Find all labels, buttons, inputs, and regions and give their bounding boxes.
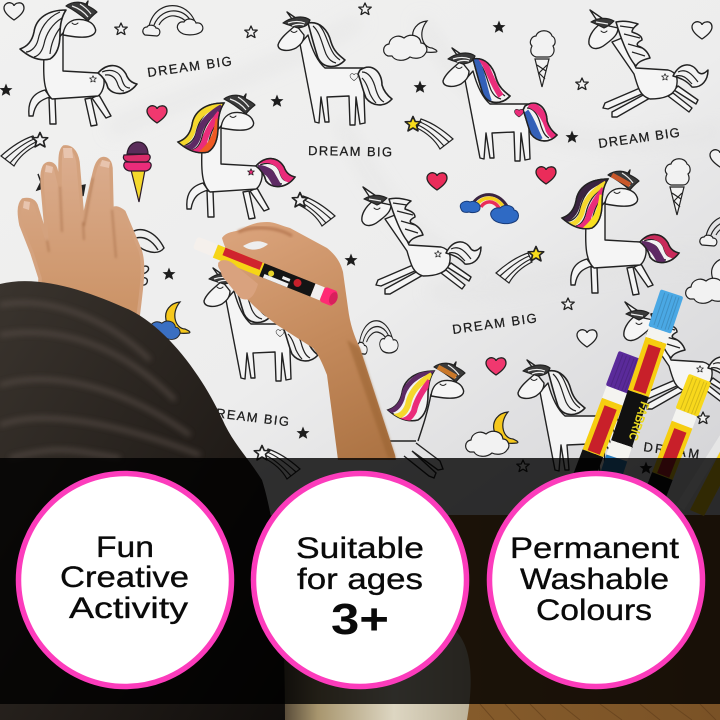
marker pen in hand — [192, 236, 340, 307]
marker: purple — [560, 351, 641, 514]
badge: fun creative activity — [18, 474, 232, 686]
badge: fun creative activity: Activity — [69, 592, 188, 625]
badge: permanent washable colours: Colours — [536, 594, 652, 627]
unicorn: right, yellow and pink mane — [562, 170, 680, 295]
marker: blue: FABRIC — [626, 400, 653, 443]
badge: suitable for ages 3+ — [254, 474, 466, 686]
dream big lettering: DREAM BIG — [451, 310, 538, 337]
thumb over pen — [218, 260, 258, 299]
hair — [0, 281, 285, 720]
marker: blue — [596, 289, 688, 492]
unicorn: rainbow mane, centre left — [178, 94, 296, 219]
unicorn: galloping top right — [589, 10, 708, 117]
small doodles — [0, 3, 720, 479]
badge: suitable for ages 3+: Suitable — [296, 532, 424, 565]
dark translucent band — [0, 458, 720, 704]
icon: coloured ice cream — [123, 142, 151, 202]
left hand — [19, 147, 143, 325]
badge: permanent washable colours — [490, 474, 702, 686]
badge: fun creative activity: Fun — [96, 531, 154, 564]
unicorn: under the pen — [204, 268, 318, 381]
dream big lettering: DREAM BIG — [146, 53, 233, 80]
cloth folds — [110, 20, 720, 291]
partial unicorn near hand — [37, 174, 164, 285]
dream big lettering — [146, 53, 700, 462]
badge: suitable for ages 3+: for ages — [297, 563, 423, 596]
badge: permanent washable colours: Washable — [520, 563, 669, 596]
unicorn: galloping centre — [362, 187, 481, 294]
dream big lettering: DREAM — [643, 439, 700, 462]
cloth sheet — [0, 0, 720, 515]
unicorn: top, outline facing left — [278, 12, 392, 125]
icon: coloured rainbow with blue clouds — [460, 195, 518, 224]
badge: suitable for ages 3+: 3+ — [331, 595, 389, 644]
dream big lettering: DREAM BIG — [597, 125, 681, 151]
icon: outline ice creams — [530, 31, 690, 215]
dream big lettering: DREAM BIG — [205, 404, 290, 429]
unicorn: top left outline — [20, 1, 137, 126]
unicorn: blue and pink mane — [443, 48, 557, 161]
unicorn: lower right outline — [518, 360, 632, 473]
right arm and hand — [218, 222, 396, 460]
badge: permanent washable colours: Permanent — [510, 532, 680, 565]
badge: fun creative activity: Creative — [60, 561, 189, 594]
dream big lettering: DREAM BIG — [308, 143, 392, 159]
marker: partial right — [676, 432, 720, 516]
unicorn: galloping behind markers — [624, 302, 720, 409]
unicorn: bottom centre, yellow mane, body hidden by arm — [386, 361, 466, 479]
marker: yellow — [633, 374, 711, 527]
